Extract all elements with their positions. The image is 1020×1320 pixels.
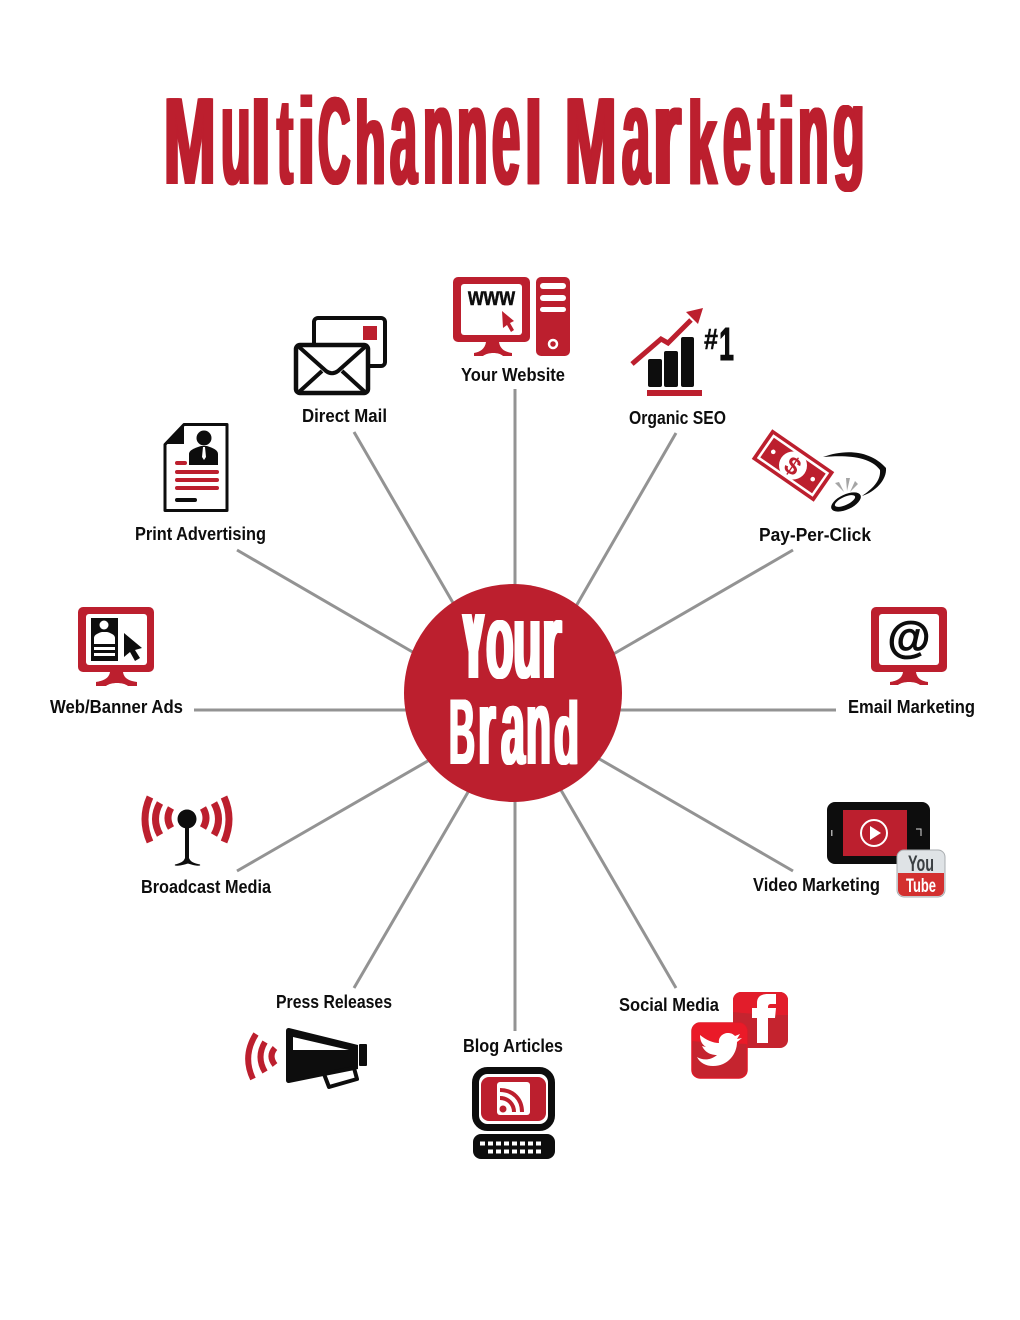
central circle: Your Brand: B — [449, 680, 475, 785]
title: g — [833, 63, 865, 193]
title: M — [565, 73, 617, 211]
icon: direct mail envelopes — [296, 318, 385, 393]
title: a — [622, 57, 650, 215]
label: Broadcast Media: Broadcast Media — [141, 877, 272, 897]
central circle: Your Brand: d — [554, 685, 578, 784]
icon: video phone with YouTube badge: You — [908, 851, 934, 876]
icon: video phone with YouTube badge: Tube — [906, 876, 936, 897]
icon: Facebook tile — [733, 992, 788, 1048]
title: t — [758, 73, 774, 211]
title: u — [221, 57, 251, 215]
label: Blog Articles: Blog Articles — [463, 1036, 563, 1056]
icon: broadcast antenna — [145, 797, 229, 865]
title: l — [525, 77, 541, 210]
central circle: Your Brand — [404, 584, 622, 802]
title: n — [798, 57, 829, 215]
title: n — [457, 57, 488, 215]
title: i — [778, 73, 795, 211]
title: h — [355, 77, 386, 210]
title: n — [423, 57, 454, 215]
central circle: Your Brand: u — [513, 581, 542, 702]
title: t — [277, 73, 293, 211]
spoke connector lines — [194, 389, 836, 1031]
icon: email monitor: @ — [888, 613, 930, 662]
icon: press megaphone — [248, 1028, 367, 1087]
title: r — [653, 57, 681, 215]
label: Direct Mail: Direct Mail — [302, 406, 387, 426]
label: Print Advertising: Print Advertising — [135, 524, 266, 544]
central circle: Your Brand: r — [478, 667, 496, 788]
icon: pay-per-click dollar and mouse swoosh: $ — [779, 451, 806, 482]
label: Email Marketing: Email Marketing — [848, 697, 975, 717]
label: Organic SEO: Organic SEO — [629, 408, 726, 428]
title: C — [318, 73, 351, 211]
title: a — [390, 57, 417, 215]
title: i — [298, 73, 314, 211]
icon: video phone with YouTube badge — [827, 802, 945, 897]
icon: pay-per-click dollar and mouse swoosh — [752, 429, 886, 516]
central circle: Your Brand: n — [526, 667, 551, 788]
icon: website computer — [453, 277, 570, 356]
title: M — [164, 73, 216, 211]
icon: website computer: www — [467, 283, 515, 311]
icon: Twitter tile — [692, 1023, 747, 1078]
central circle: Your Brand: Y — [464, 595, 483, 699]
icon: organic SEO chart: # — [704, 324, 718, 356]
central circle: Your Brand: r — [542, 581, 562, 702]
icon: organic SEO chart: 1 — [719, 318, 734, 370]
title — [164, 57, 865, 215]
icon: blog computer with RSS — [473, 1070, 555, 1159]
label: Press Releases: Press Releases — [276, 992, 392, 1012]
label: Social Media: Social Media — [619, 995, 720, 1015]
title: k — [688, 77, 717, 210]
title: l — [251, 77, 271, 210]
label: Your Website: Your Website — [461, 365, 565, 385]
icon: email monitor — [871, 607, 947, 685]
icon: print advertising document — [164, 424, 227, 510]
label: Pay-Per-Click: Pay-Per-Click — [759, 525, 872, 545]
icon: web banner ad monitor — [78, 607, 154, 686]
icon: organic SEO chart — [632, 308, 734, 396]
title: e — [492, 57, 521, 215]
title: e — [723, 57, 751, 215]
central circle: Your Brand: o — [486, 581, 514, 702]
label: Web/Banner Ads: Web/Banner Ads — [50, 697, 183, 717]
label: Video Marketing: Video Marketing — [753, 875, 880, 895]
central circle: Your Brand: a — [501, 667, 525, 788]
